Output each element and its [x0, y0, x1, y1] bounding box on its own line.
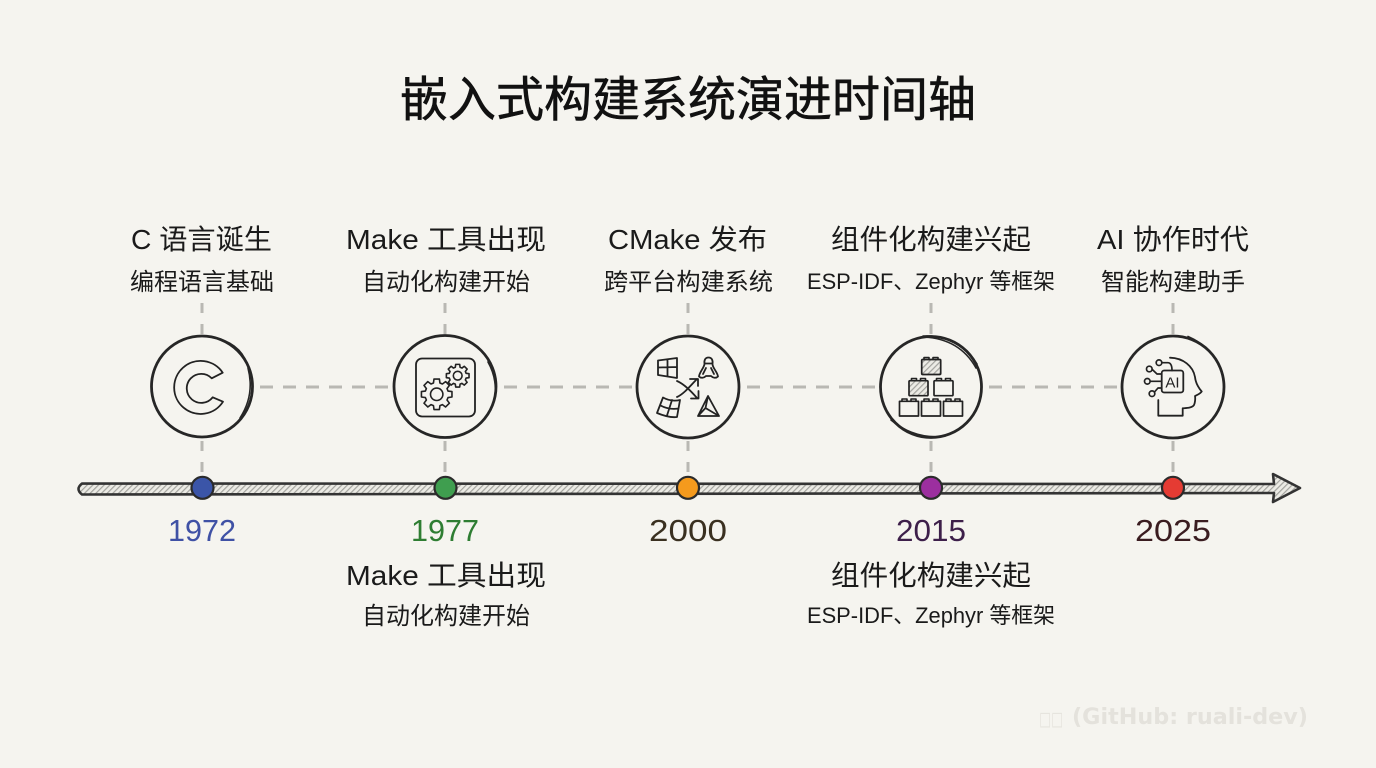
title: 嵌入式构建系统演进时间轴: [400, 74, 976, 127]
bottom label 1977: [346, 560, 546, 630]
year 2015: 2015: [896, 513, 966, 548]
bottom label 2015: [807, 560, 1055, 628]
heading: components: 组件化构建兴起: [831, 224, 1031, 255]
heading: Make: Make 工具出现: [346, 224, 546, 255]
bottom row blocks: [900, 399, 962, 416]
milestone 2015 top label: [807, 224, 1055, 294]
subheading: CMake: 跨平台构建系统: [604, 269, 773, 296]
middle hatched block: [909, 378, 928, 396]
year 1977: 1977: [411, 513, 479, 548]
small gear: [446, 364, 469, 387]
AI chip: [1162, 370, 1183, 392]
year 1972: 1972: [168, 513, 236, 548]
heading: CMake: CMake 发布: [608, 224, 767, 255]
subheading: Make repeated: 自动化构建开始: [362, 603, 530, 630]
triangle logo: [698, 396, 719, 416]
subheading: Make: 自动化构建开始: [362, 269, 530, 296]
subheading: AI: 智能构建助手: [1101, 269, 1245, 296]
milestone 2000 top label: [604, 224, 773, 296]
heading: components repeated: 组件化构建兴起: [831, 560, 1031, 591]
marker 2015: [920, 477, 942, 499]
marker 1977: [434, 477, 456, 499]
marker 2025: [1162, 477, 1184, 499]
flag logo: [657, 398, 680, 417]
icon: component blocks: [880, 336, 982, 438]
year 2000: 2000: [649, 513, 727, 548]
icon: AI head: AI: [1165, 374, 1180, 392]
timeline arrow: [78, 474, 1300, 502]
large gear: [421, 379, 452, 410]
circuit nodes: [1150, 363, 1172, 392]
year 2025: 2025: [1135, 513, 1211, 548]
icon: cross-platform: [637, 336, 739, 438]
heading: C language: C 语言诞生: [131, 224, 272, 255]
icon: AI head: [1122, 336, 1224, 438]
heading: Make repeated: Make 工具出现: [346, 560, 546, 591]
milestone 1977 top label: [346, 224, 546, 296]
subheading: components: ESP-IDF、Zephyr 等框架: [807, 269, 1055, 294]
icon: Make gears: [394, 336, 496, 438]
icon: C language: [152, 336, 252, 437]
watermark: □□: [1039, 708, 1063, 730]
subheading: components repeated: ESP-IDF、Zephyr 等框架: [807, 603, 1055, 628]
marker 1972: [192, 477, 214, 499]
watermark: (GitHub: ruali-dev): [1072, 705, 1308, 730]
milestone 1972 top label: [130, 224, 274, 296]
gear box: [416, 358, 475, 416]
heading: AI: AI 协作时代: [1097, 224, 1249, 255]
head outline: [1158, 358, 1202, 416]
windows logo: [658, 358, 677, 378]
milestone 2025 top label: [1097, 224, 1249, 296]
platform arrows: [677, 379, 698, 398]
marker 2000: [677, 477, 699, 499]
linux penguin: [699, 358, 718, 378]
subheading: C language: 编程语言基础: [130, 269, 274, 296]
middle plain block: [934, 378, 953, 396]
top block: [922, 358, 941, 374]
